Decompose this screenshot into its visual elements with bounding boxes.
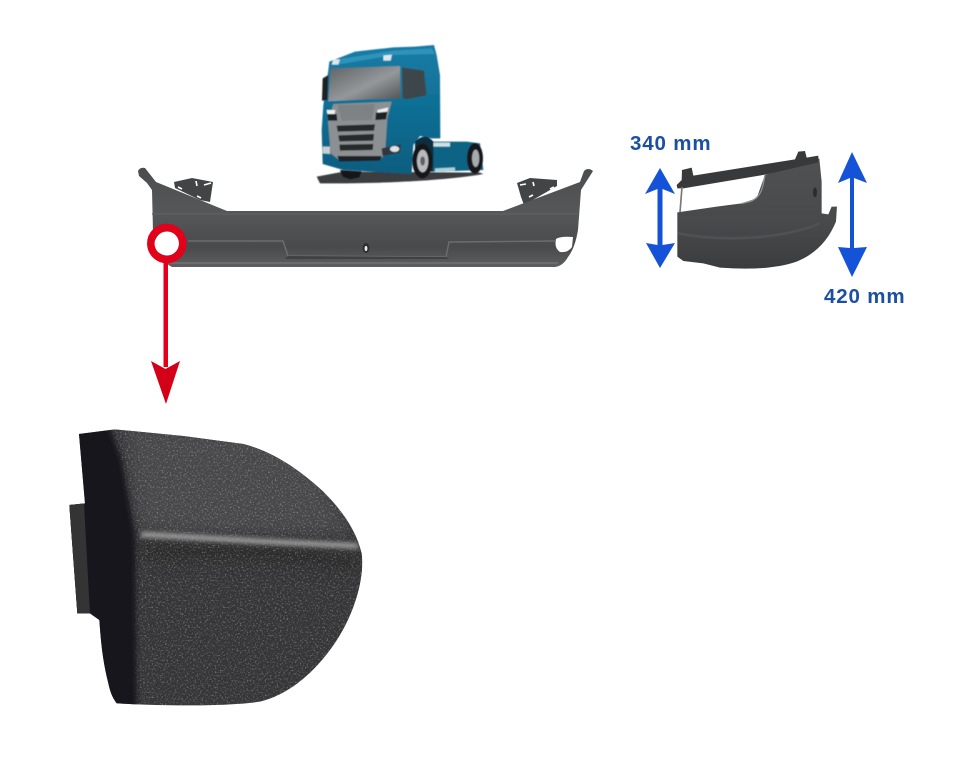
cap surface grain: [110, 430, 362, 706]
truck headlights: [323, 144, 401, 162]
truck chassis: [432, 142, 483, 172]
bumper: full lower bumper: [138, 168, 593, 267]
bumper center slot: [362, 243, 370, 253]
truck cab body: [322, 45, 440, 174]
bumper highlights: [152, 213, 578, 215]
dimension label: 420 mm: 420 mm: [824, 285, 905, 308]
corner small hole: [813, 187, 817, 197]
cap upper surface shading: [123, 427, 353, 535]
right bracket: [517, 178, 557, 205]
cap crease shadow: [140, 552, 360, 563]
truck windshield: [328, 66, 401, 101]
left bracket: [174, 178, 213, 202]
corner opening edges: [680, 187, 682, 212]
red callout arrow: [151, 262, 180, 404]
bumper left hole: [155, 232, 179, 256]
cap side tab: [69, 504, 90, 614]
corner bumper piece: [677, 151, 837, 269]
truck rear wheel: [467, 143, 483, 174]
dimension label: 340 mm: 340 mm: [630, 132, 711, 155]
dimension arrow: 340 mm: [645, 168, 675, 268]
cap body: [69, 429, 362, 706]
dimension arrow: 420 mm: [838, 152, 867, 277]
truck grille: [327, 102, 392, 160]
corner main body: [677, 158, 837, 269]
truck mirror: [322, 75, 328, 101]
corner crease: [678, 223, 820, 238]
icon: truck photo: [317, 45, 483, 183]
red highlight ring: [151, 228, 183, 260]
bumper body: [138, 168, 593, 267]
truck side window: [402, 67, 427, 99]
corner upper strip: [677, 151, 818, 188]
cap crease highlight: [141, 534, 358, 546]
truck ground shadow: [317, 172, 483, 183]
bumper right hole: [556, 237, 573, 252]
truck left wheel: [340, 170, 362, 179]
zoomed bumper cap detail: [69, 429, 362, 706]
truck front wheel: [412, 137, 433, 178]
cap left shadow side: [67, 420, 137, 713]
